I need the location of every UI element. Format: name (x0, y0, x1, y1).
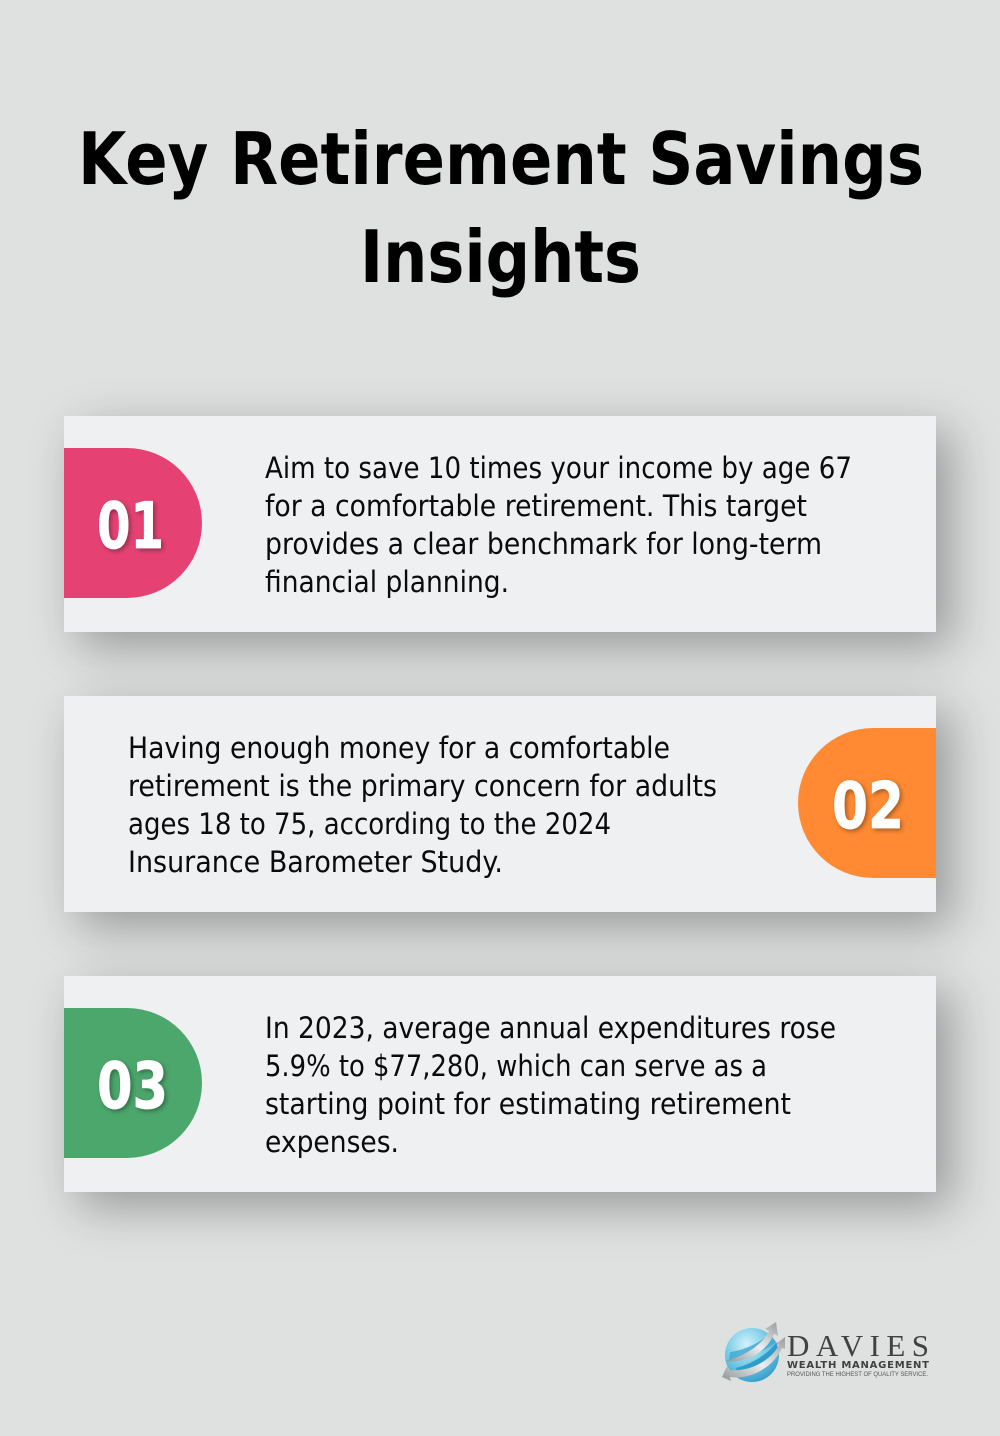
badge: 02: 02 (832, 770, 904, 844)
panel: card 1 background (64, 416, 936, 632)
text block: card 3: starting point for estimating retirement (265, 1087, 791, 1121)
logo wordmark: WEALTH MANAGEMENT (787, 1360, 929, 1371)
text block: card 1: Aim to save 10 times your income by age 67 (265, 451, 852, 485)
panel: card 3 background (64, 976, 936, 1192)
title: Insights (360, 215, 641, 299)
text block: card 3 (265, 1011, 836, 1159)
text block: card 2: Having enough money for a comfortable (128, 731, 670, 765)
icon: globe with arrows (722, 1322, 785, 1382)
badge: 01: 01 (97, 490, 164, 564)
text block: card 2 (128, 731, 717, 879)
logo wordmark (787, 1328, 929, 1378)
logo wordmark: PROVIDING THE HIGHEST OF QUALITY SERVICE. (787, 1371, 928, 1378)
text block: card 1 (265, 451, 852, 599)
logo wordmark: DAVIES (787, 1328, 929, 1363)
badge: 01 (64, 448, 202, 598)
text block: card 1: financial planning. (265, 565, 509, 599)
text block: card 3: In 2023, average annual expenditures rose (265, 1011, 836, 1045)
text block: card 2: Insurance Barometer Study. (128, 845, 503, 879)
text block: card 2: ages 18 to 75, according to the 2024 (128, 807, 611, 841)
logo: Davies Wealth Management (722, 1322, 929, 1382)
text block: card 3: expenses. (265, 1125, 399, 1159)
text block: card 1: for a comfortable retirement. This target (265, 489, 807, 523)
badge: 02 (798, 728, 936, 878)
text block: card 1: provides a clear benchmark for long-term (265, 527, 822, 561)
text block: card 2: retirement is the primary concern for adults (128, 769, 717, 803)
text block: card 3: 5.9% to $77,280, which can serve as a (265, 1049, 767, 1083)
title (78, 117, 924, 299)
badge: 03 (64, 1008, 202, 1158)
badge: 03: 03 (97, 1050, 168, 1124)
panel: card 2 background (64, 696, 936, 912)
